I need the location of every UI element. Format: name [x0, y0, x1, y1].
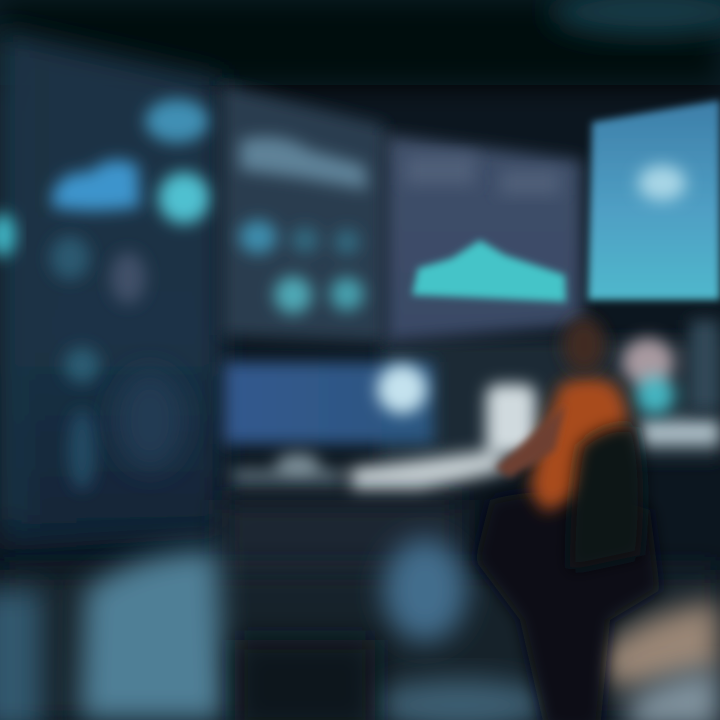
icons: teal dots [239, 220, 364, 314]
desk base: dark cabinet [222, 500, 462, 630]
chart: teal area [412, 240, 566, 302]
head [562, 317, 606, 373]
icons: left wall glowing widgets [0, 99, 210, 490]
figure: person at desk in orange shirt [475, 317, 660, 720]
panel: centre data wall [222, 85, 385, 342]
torso [530, 378, 627, 512]
panel: lower blue screen [224, 362, 434, 444]
panel: right bright screen [588, 100, 720, 300]
panel: left data wall [0, 30, 222, 550]
chart: pale line blocks [240, 137, 368, 190]
panel: middle screen with teal area chart [386, 135, 582, 342]
desk: white work surface [232, 384, 720, 492]
floor: reflective blue glow [0, 538, 720, 720]
arm [495, 405, 565, 478]
chair back [570, 426, 643, 570]
screen: background colour glow behind person [622, 320, 720, 415]
chair and legs [475, 492, 660, 720]
